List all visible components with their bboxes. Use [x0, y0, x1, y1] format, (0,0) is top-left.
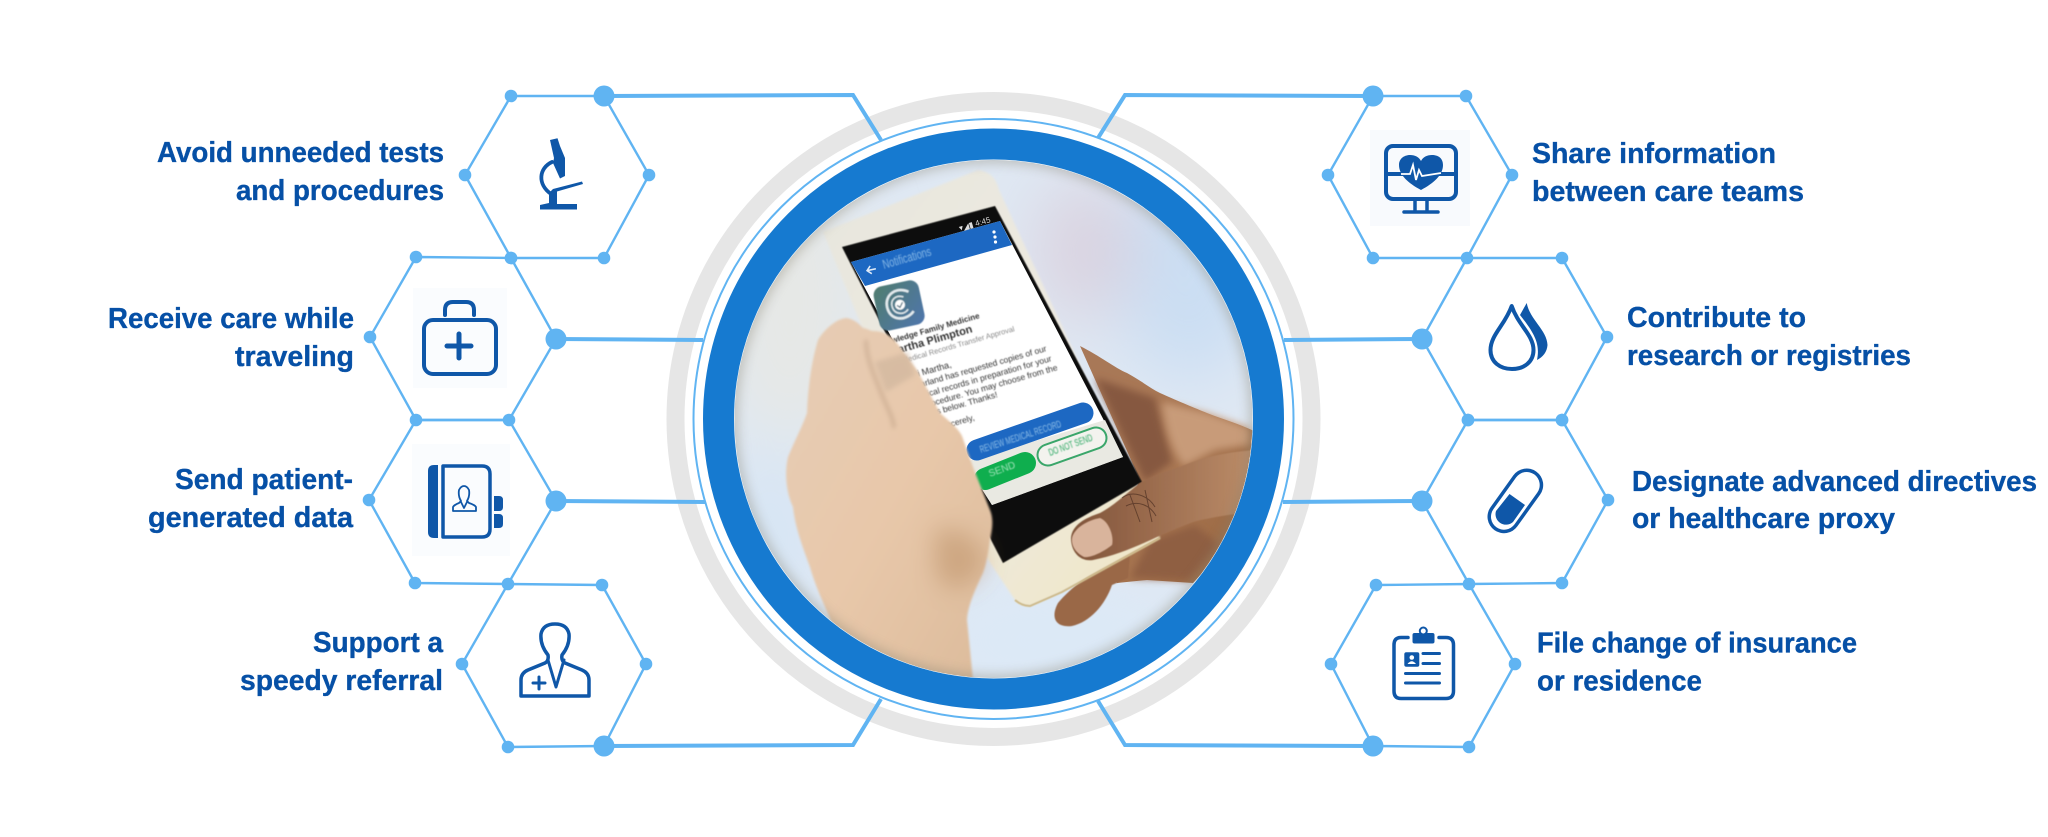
message text: Doctor McFarland has requested copies of our [877, 343, 1048, 401]
text: share information: Share information [1532, 138, 1776, 170]
do not send button: DO NOT SEND [1047, 433, 1094, 459]
hexagon [1325, 579, 1521, 756]
lower finger [1054, 555, 1130, 626]
icon: drops [1490, 303, 1548, 369]
text: file change of insurance: or residence [1537, 666, 1702, 698]
text: send patient-generated data: Send patient- [175, 464, 353, 496]
text: share information: between care teams [1532, 176, 1804, 208]
hexagon [363, 420, 566, 590]
panel: designate advanced directives [1412, 414, 2037, 590]
text: contribute to research [1627, 302, 1911, 372]
right thumb [1071, 450, 1256, 560]
message text: practice's medical records in preparation for your [873, 353, 1053, 414]
icon: clipboard [1394, 628, 1454, 698]
message text: Practice: Knowledge Family Medicine [841, 311, 981, 359]
gray outer ring [676, 101, 1312, 737]
blue ring [718, 144, 1268, 694]
text: avoid unneeded tests: Avoid unneeded tests [157, 137, 444, 169]
text: receive care while traveling: Receive care while [108, 303, 354, 335]
review button [977, 413, 1083, 456]
hexagon [1412, 252, 1613, 426]
text: support a speedy referral: Support a [313, 627, 444, 659]
photo edge shadow [732, 157, 1256, 681]
text: designate advanced directives: Designate advanced directives [1632, 466, 2037, 498]
panel: contribute to research [1412, 252, 1911, 426]
text: avoid unneeded tests: and procedures [236, 175, 444, 207]
phone screen [851, 221, 1123, 505]
text: file change of insurance [1537, 628, 1857, 698]
icon: first aid kit [413, 288, 507, 388]
text: file change of insurance: File change of insurance [1537, 628, 1857, 660]
panel: send patient-generated data [148, 420, 566, 590]
thin blue ring [694, 119, 1294, 719]
text: receive care while traveling: traveling [235, 341, 354, 373]
app logo [872, 279, 926, 332]
icon: microscope [540, 138, 583, 210]
right hand behind phone [1080, 346, 1256, 583]
hexagon [456, 579, 652, 756]
photo background [720, 155, 1265, 690]
hexagon [459, 86, 655, 264]
review button: REVIEW MEDICAL RECORD [979, 419, 1063, 456]
phone black bezel [842, 206, 1142, 563]
app header [851, 221, 1012, 286]
icon: notebook [412, 444, 510, 556]
icon: pill [1496, 485, 1527, 525]
do not send button [1047, 433, 1096, 459]
photo: hands holding phone [720, 155, 1265, 690]
text: designate advanced directives [1632, 466, 2037, 535]
text: support a speedy referral [240, 627, 444, 697]
message text: options below. Thanks! [913, 389, 999, 423]
message text: upcoming procedure. You may choose from the [885, 362, 1059, 421]
panel: avoid unneeded tests [157, 86, 655, 264]
app header: Notifications [881, 245, 933, 272]
text: share information [1532, 138, 1804, 208]
text: designate advanced directives: or healthcare proxy [1632, 503, 1895, 535]
connector lines [556, 95, 1422, 746]
message text [892, 314, 1058, 426]
screen bottom area [965, 420, 1123, 505]
text: contribute to research: Contribute to [1627, 302, 1806, 334]
panel: support a speedy referral [240, 579, 652, 756]
message text: Hi Martha, [910, 359, 953, 380]
left hand [786, 318, 992, 680]
panel: receive care while traveling [108, 251, 566, 426]
message text: Subject: Medical Records Transfer Approval [873, 324, 1016, 373]
message text: Sincerely, [938, 412, 976, 432]
icon: heart monitor [1370, 130, 1470, 226]
icon: doctor [521, 624, 589, 696]
infographic [110, 86, 2036, 756]
send button: SEND [987, 460, 1017, 480]
text: send patient-generated data: generated data [148, 502, 354, 534]
text: send patient-generated data [148, 464, 354, 534]
text: contribute to research: research or registries [1627, 340, 1911, 372]
phone body [823, 170, 1160, 606]
hexagon [1322, 86, 1518, 264]
phone status text: ▾◢▮ 4:45 [958, 215, 992, 233]
panel: share information [1322, 86, 1804, 264]
panel: file change of insurance [1325, 579, 1857, 756]
text: avoid unneeded tests [157, 137, 444, 207]
text: receive care while traveling [108, 303, 354, 373]
hexagon [1412, 414, 1614, 590]
message text: To: Martha Plimpton [869, 323, 974, 364]
text: support a speedy referral: speedy referral [240, 665, 443, 697]
hexagon [364, 251, 566, 426]
